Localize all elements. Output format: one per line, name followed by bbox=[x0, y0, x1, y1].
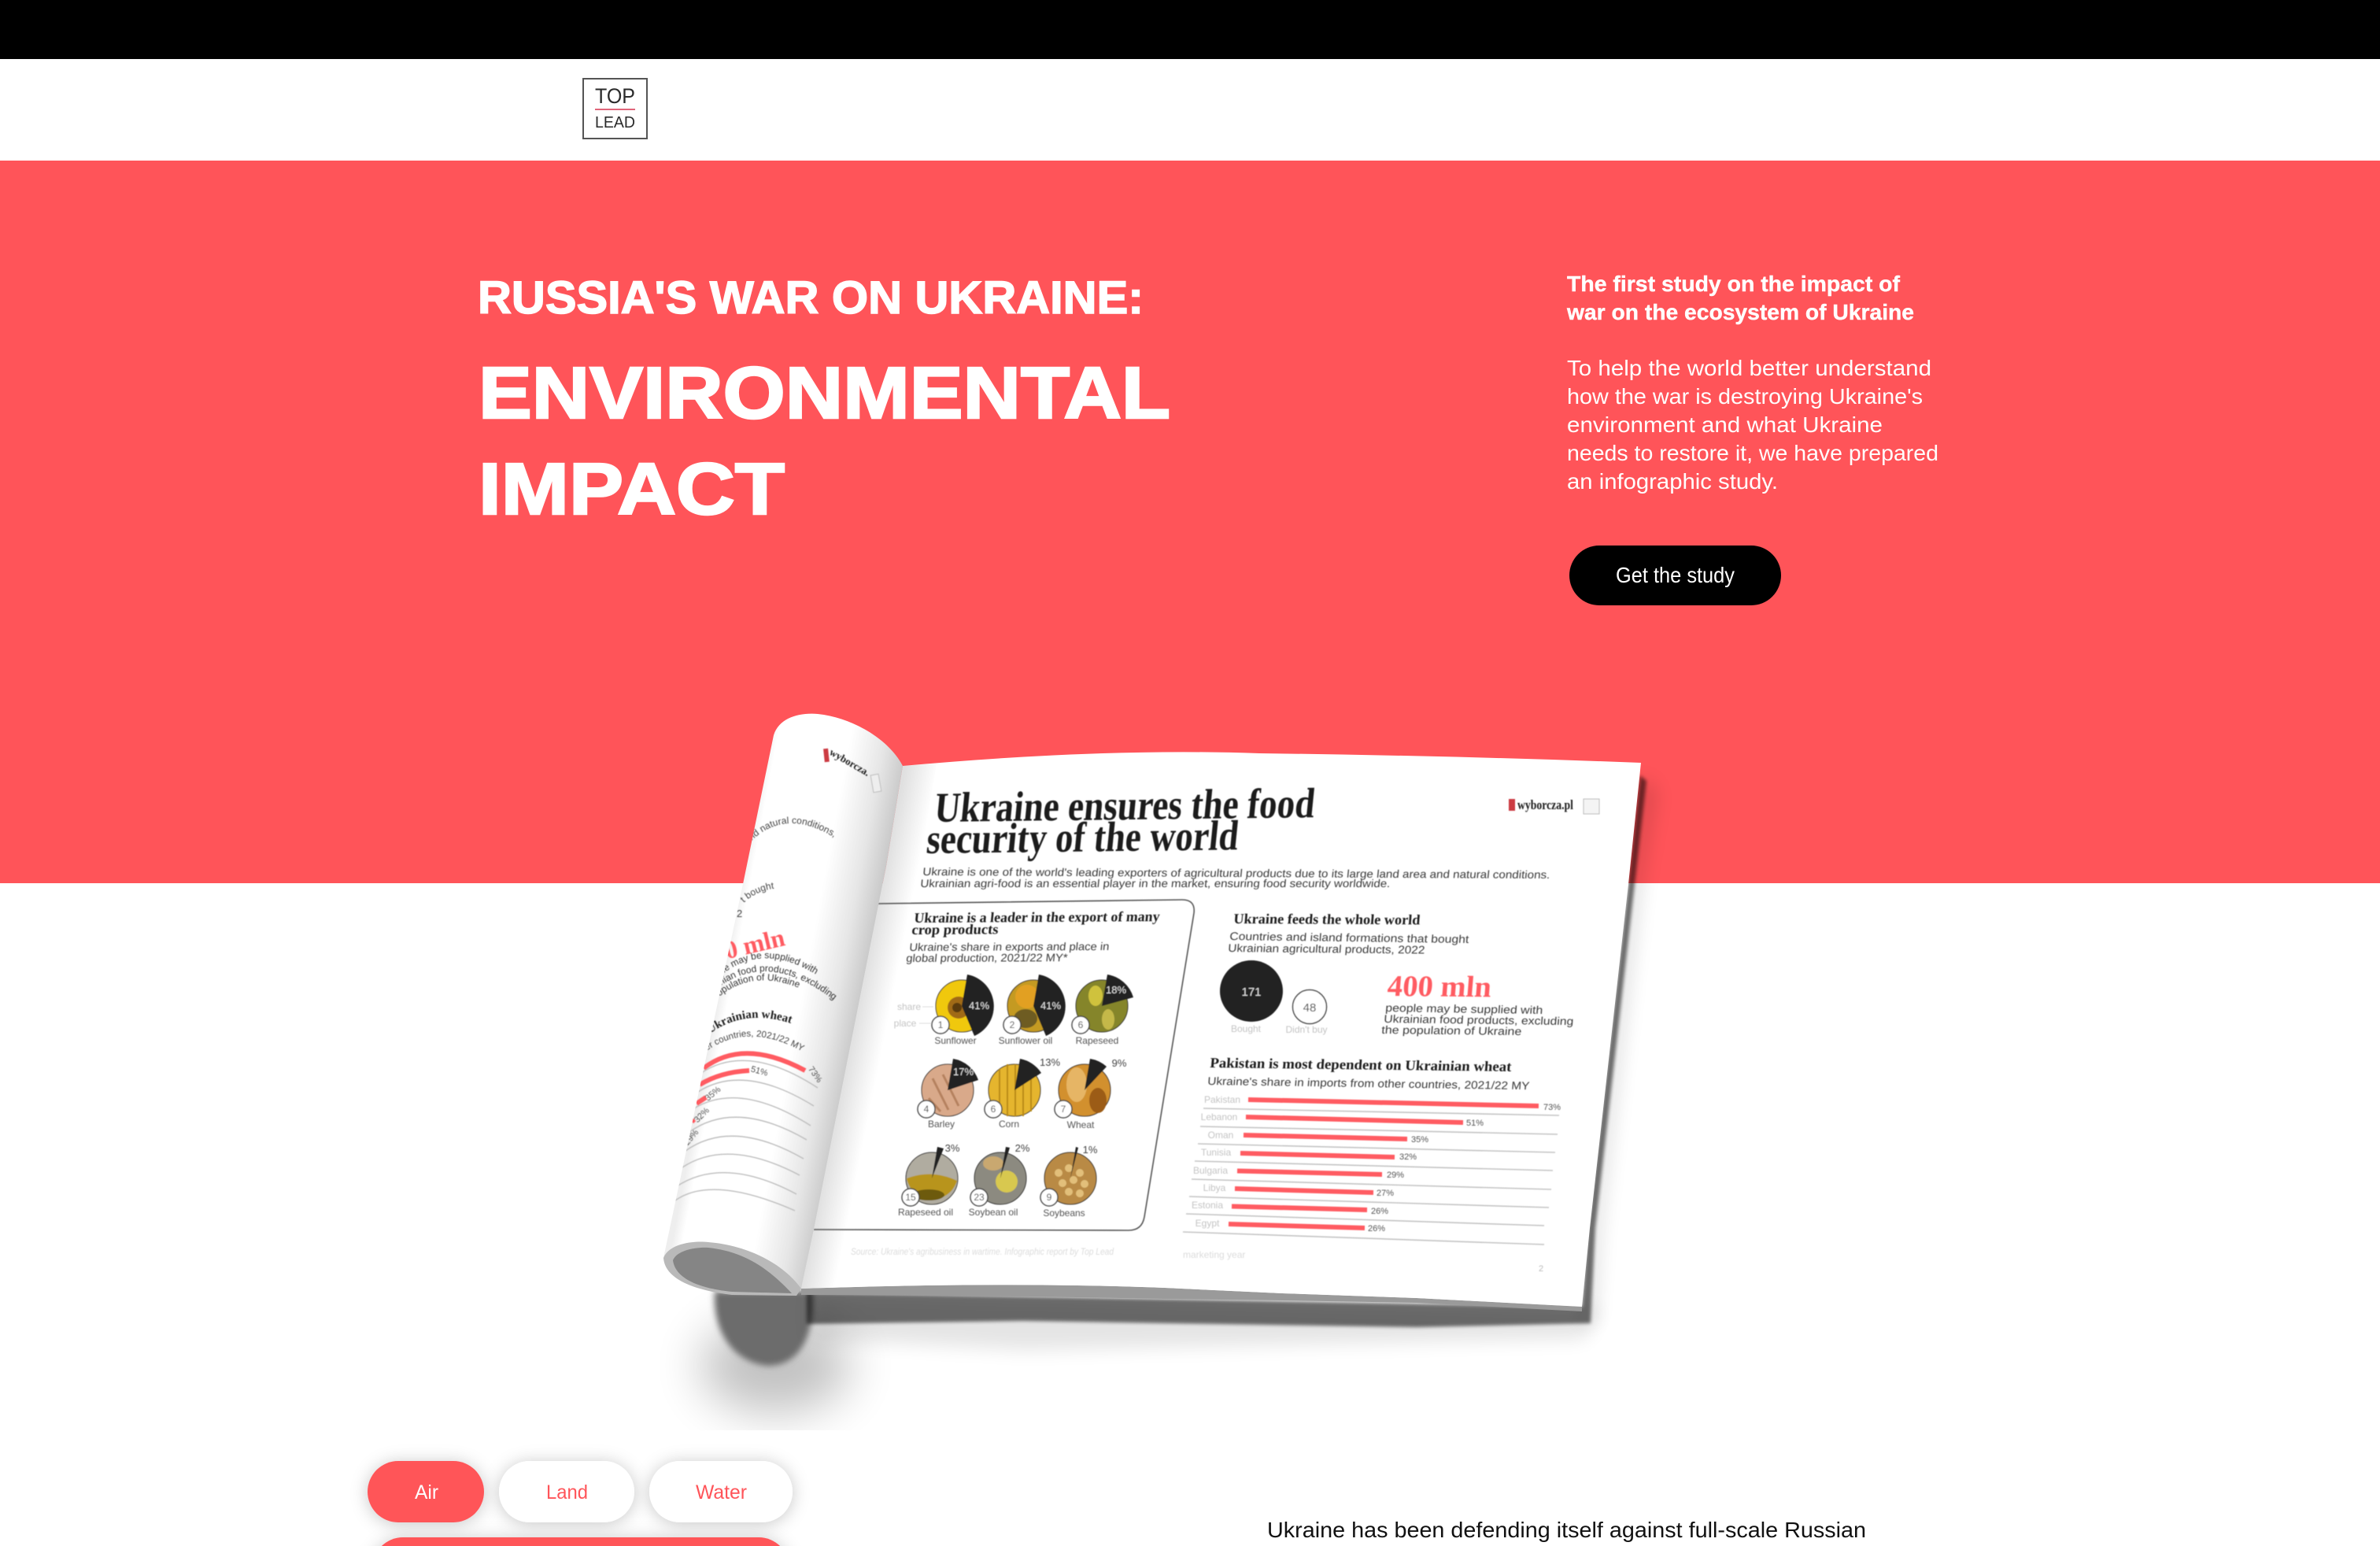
crop: sunflower 41%: 41% bbox=[969, 1000, 989, 1012]
country labels: Egypt bbox=[1196, 1218, 1220, 1229]
callout: 400 mln: 400 mln bbox=[1386, 970, 1493, 1004]
magazine headline bbox=[925, 779, 1318, 863]
crop: soybean oil 2%: 2% bbox=[1015, 1142, 1030, 1154]
curled page content: 2 bbox=[737, 908, 742, 919]
crop: soybeans 1%: 1% bbox=[1083, 1144, 1098, 1156]
legend: share and place bbox=[894, 1001, 933, 1029]
crop: rapeseed oil 3%: Rapeseed oil bbox=[898, 1207, 953, 1218]
bubble: countries didn't buy 48: 48 bbox=[1303, 1001, 1316, 1015]
panel heading bbox=[906, 908, 1161, 964]
section: Ukraine feeds the whole world: Countries and island formations that bought bbox=[1229, 930, 1469, 945]
crop: sunflower oil 41%: 41% bbox=[1040, 1000, 1061, 1012]
crop: wheat 9%: Wheat bbox=[1067, 1119, 1095, 1130]
value labels: 51% bbox=[1466, 1119, 1484, 1128]
panel heading: crop products bbox=[911, 921, 1000, 938]
crop: wheat 9%: 7 bbox=[1061, 1104, 1066, 1115]
callout: 400 mln bbox=[1381, 970, 1574, 1037]
hero intro text: an infographic study. bbox=[1567, 469, 1778, 494]
hero title bbox=[478, 272, 1170, 530]
legend: share and place: share bbox=[897, 1001, 921, 1012]
curled page content bbox=[675, 748, 881, 1211]
crop: barley 17%: Barley bbox=[928, 1119, 955, 1130]
crop: barley 17% bbox=[918, 1059, 978, 1130]
panel heading: Ukraine's share in exports and place in bbox=[909, 940, 1110, 953]
country labels: Lebanon bbox=[1201, 1111, 1237, 1123]
magazine intro paragraph bbox=[920, 865, 1550, 890]
legend: share and place: place bbox=[894, 1018, 917, 1029]
curled page content: er countries, 2021/22 MY bbox=[708, 1030, 805, 1050]
logo: Top Lead: LEAD bbox=[595, 114, 635, 131]
crop: sunflower oil 41%: Sunflower oil bbox=[999, 1035, 1052, 1046]
crop: sunflower 41%: 1 bbox=[938, 1019, 944, 1030]
tab: land: Land bbox=[546, 1481, 588, 1503]
callout: 400 mln: Ukrainian food products, excluding bbox=[1384, 1012, 1574, 1027]
hero title: RUSSIA'S WAR ON UKRAINE: bbox=[478, 272, 1144, 324]
curled page content: 73% bbox=[806, 1065, 824, 1085]
magazine intro paragraph: Ukrainian agri-food is an essential player in the market, ensuring food security worldwide. bbox=[920, 877, 1391, 890]
footnote and page number: marketing year bbox=[1183, 1249, 1245, 1260]
country labels: Tunisia bbox=[1201, 1147, 1231, 1158]
curled page content: wyborcza.pl bbox=[830, 749, 868, 776]
crop: barley 17%: 4 bbox=[924, 1104, 929, 1115]
crop: barley 17%: 17% bbox=[953, 1066, 974, 1078]
crop: corn 13%: 13% bbox=[1040, 1056, 1060, 1068]
magazine right page bbox=[801, 752, 1641, 1311]
tab: water: Water bbox=[696, 1481, 747, 1503]
section: Ukraine feeds the whole world: Ukrainian agricultural products, 2022 bbox=[1228, 941, 1425, 956]
hero intro text: To help the world better understand bbox=[1567, 356, 1931, 380]
crop: rapeseed 18% bbox=[1072, 975, 1133, 1046]
hero intro heading: The first study on the impact of bbox=[1567, 272, 1901, 296]
country labels: Pakistan bbox=[1204, 1094, 1240, 1105]
curled page content: 29% bbox=[682, 1128, 701, 1147]
curled page content: t bought bbox=[740, 882, 774, 903]
section: bar chart of wheat dependence: Pakistan is most dependent on Ukrainian wheat bbox=[1210, 1055, 1512, 1074]
crop: corn 13%: 6 bbox=[991, 1104, 996, 1115]
crop: rapeseed oil 3%: 3% bbox=[945, 1142, 960, 1154]
crop: rapeseed oil 3%: 15 bbox=[905, 1192, 916, 1203]
value labels: 27% bbox=[1377, 1189, 1394, 1198]
crop: rapeseed 18%: Rapeseed bbox=[1076, 1035, 1118, 1046]
hero red background bbox=[0, 161, 2380, 883]
value labels: 26% bbox=[1371, 1207, 1388, 1216]
callout: 400 mln: the population of Ukraine bbox=[1381, 1023, 1522, 1037]
crop: wheat 9%: 9% bbox=[1112, 1057, 1127, 1069]
crop: soybean oil 2%: Soybean oil bbox=[969, 1207, 1018, 1218]
curled page content: 51% bbox=[750, 1064, 769, 1078]
footnote and page number bbox=[1183, 1249, 1543, 1274]
country labels: Bulgaria bbox=[1193, 1165, 1228, 1176]
hero intro text: needs to restore it, we have prepared bbox=[1567, 441, 1938, 465]
value labels bbox=[1368, 1103, 1561, 1233]
section: Ukraine feeds the whole world bbox=[1220, 911, 1574, 1037]
magazine brand logos: wyborcza.pl bbox=[1517, 797, 1573, 812]
bubble: countries bought 171 bbox=[1220, 960, 1283, 1034]
bubble: countries bought 171: Bought bbox=[1231, 1023, 1262, 1034]
page curl underside bbox=[663, 1242, 801, 1296]
top black bar bbox=[0, 0, 2380, 59]
value labels: 35% bbox=[1411, 1135, 1428, 1145]
logo: Top Lead: TOP bbox=[595, 84, 635, 108]
crop: rapeseed oil 3% bbox=[898, 1142, 960, 1218]
value labels: 73% bbox=[1543, 1103, 1561, 1112]
curled page content: le may be supplied with bbox=[724, 952, 819, 975]
bars bbox=[1229, 1100, 1539, 1228]
country labels: Libya bbox=[1203, 1182, 1226, 1193]
section: bar chart of wheat dependence bbox=[1183, 1055, 1561, 1245]
source note: Source: Ukraine's agribusiness in wartime. Infographic report by Top Lead bbox=[851, 1246, 1114, 1257]
button: get the study: Get the study bbox=[1616, 563, 1735, 587]
crop: corn 13% bbox=[985, 1056, 1060, 1130]
logo: Top Lead bbox=[583, 79, 647, 139]
crop: sunflower oil 41% bbox=[999, 975, 1066, 1046]
crop: soybeans 1%: Soybeans bbox=[1043, 1208, 1085, 1219]
tab: air: Air bbox=[415, 1481, 438, 1503]
curled page content: 32% bbox=[693, 1106, 711, 1125]
section: bar chart of wheat dependence: Ukraine's share in imports from other countries, 2021/22 MY bbox=[1207, 1074, 1531, 1092]
body text: Ukraine has been defending itself against full-scale Russian bbox=[1267, 1518, 1866, 1542]
magazine brand logos bbox=[1509, 797, 1599, 814]
tab: water bbox=[649, 1461, 793, 1522]
crop: soybean oil 2% bbox=[969, 1142, 1030, 1218]
crop: soybean oil 2%: 23 bbox=[974, 1192, 985, 1203]
footnote and page number: 2 bbox=[1539, 1264, 1543, 1274]
panel heading: global production, 2021/22 MY* bbox=[906, 951, 1069, 964]
bubble: countries bought 171: 171 bbox=[1241, 986, 1262, 999]
bubble: countries didn't buy 48: Didn't buy bbox=[1286, 1024, 1327, 1035]
magazine shadows bbox=[700, 775, 1657, 1413]
hero title: IMPACT bbox=[479, 448, 785, 530]
tab: air bbox=[368, 1461, 484, 1522]
hero intro text: environment and what Ukraine bbox=[1567, 412, 1883, 437]
panel: crop exports bbox=[814, 900, 1194, 1230]
crop: rapeseed 18%: 18% bbox=[1106, 984, 1126, 996]
bubble: countries didn't buy 48 bbox=[1286, 990, 1327, 1035]
magazine headline: security of the world bbox=[925, 812, 1241, 863]
curled page content: 35% bbox=[704, 1085, 723, 1103]
crop: sunflower 41%: Sunflower bbox=[934, 1035, 977, 1046]
curled page content: nd natural conditions, bbox=[752, 816, 834, 841]
tab: land bbox=[499, 1461, 634, 1522]
curled page content: nian food products, excluding bbox=[721, 964, 837, 1001]
filter tabs bbox=[368, 1461, 793, 1546]
value labels: 32% bbox=[1399, 1152, 1417, 1162]
magazine intro paragraph: Ukraine is one of the world's leading exporters of agricultural products due to its large land area and natural conditions. bbox=[922, 865, 1550, 881]
crop: sunflower oil 41%: 2 bbox=[1010, 1019, 1015, 1030]
crop: corn 13%: Corn bbox=[999, 1119, 1019, 1130]
curled page content: 00 mln bbox=[727, 931, 786, 959]
selected sub-tab pill bbox=[372, 1537, 789, 1546]
country labels: Estonia bbox=[1192, 1200, 1223, 1211]
magazine curled left page bbox=[663, 713, 903, 1296]
curled page content: opulation of Ukraine bbox=[719, 973, 800, 997]
magazine headline: Ukraine ensures the food bbox=[933, 779, 1318, 831]
grid lines bbox=[1183, 1108, 1559, 1245]
callout: 400 mln: people may be supplied with bbox=[1385, 1001, 1543, 1016]
hero intro heading: war on the ecosystem of Ukraine bbox=[1566, 300, 1914, 324]
crop: soybeans 1%: 9 bbox=[1047, 1192, 1052, 1203]
country labels bbox=[1192, 1094, 1240, 1229]
value labels: 29% bbox=[1387, 1171, 1404, 1180]
crop: rapeseed 18%: 6 bbox=[1078, 1019, 1084, 1030]
country labels: Oman bbox=[1208, 1130, 1233, 1141]
curled page content: Ukrainian wheat bbox=[711, 1009, 793, 1033]
hero intro text: how the war is destroying Ukraine's bbox=[1567, 384, 1923, 409]
crop: soybeans 1% bbox=[1040, 1144, 1098, 1219]
hero intro text bbox=[1567, 356, 1938, 494]
crop: wheat 9% bbox=[1055, 1057, 1127, 1130]
panel heading: Ukraine is a leader in the export of many bbox=[914, 908, 1161, 926]
button: get the study bbox=[1569, 546, 1781, 605]
crop: sunflower 41% bbox=[932, 975, 994, 1046]
section: Ukraine feeds the whole world: Ukraine feeds the whole world bbox=[1233, 911, 1421, 927]
hero title: ENVIRONMENTAL bbox=[479, 352, 1170, 434]
hero intro heading bbox=[1566, 272, 1914, 324]
value labels: 26% bbox=[1368, 1224, 1385, 1233]
